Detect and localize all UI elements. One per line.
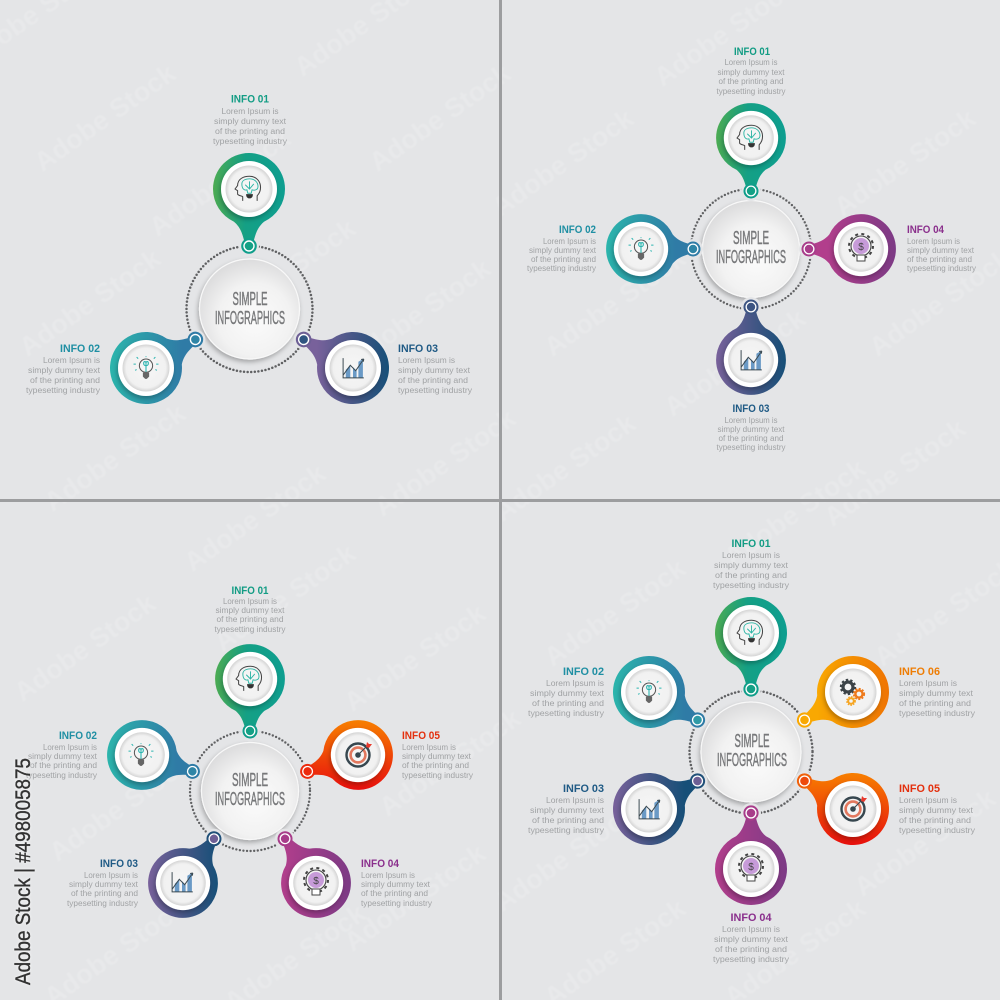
text: info 03: Lorem Ipsum is bbox=[84, 870, 138, 880]
node: info 03 bbox=[134, 811, 248, 932]
text: info 04 bbox=[713, 912, 790, 964]
center circle: INFOGRAPHICS bbox=[717, 750, 787, 770]
text: info 01: typesetting industry bbox=[214, 624, 286, 634]
node: info 03 bbox=[600, 745, 724, 858]
text: info 04 bbox=[361, 858, 433, 908]
text: info 03: INFO 03 bbox=[398, 343, 438, 355]
center circle: SIMPLE bbox=[232, 289, 268, 309]
node: info 04: $ bbox=[748, 862, 754, 873]
center circle: SIMPLE bbox=[734, 731, 770, 751]
text: info 06: INFO 06 bbox=[899, 666, 940, 678]
watermark pattern: Adobe Stock bbox=[849, 782, 1000, 902]
text: info 04: of the printing and bbox=[715, 944, 787, 954]
watermark pattern: Adobe Stock bbox=[364, 57, 517, 177]
node: info 01 bbox=[213, 153, 285, 256]
text: info 01: INFO 01 bbox=[231, 94, 269, 106]
text: info 01: INFO 01 bbox=[734, 46, 770, 58]
text: info 04: simply dummy text bbox=[714, 934, 789, 944]
dotted ring bbox=[186, 246, 312, 372]
node: info 05 bbox=[287, 711, 402, 808]
text: info 05: typesetting industry bbox=[899, 825, 976, 835]
node: info 04: $ bbox=[313, 876, 319, 887]
text: info 03: simply dummy text bbox=[530, 805, 605, 815]
text: info 02: typesetting industry bbox=[528, 708, 605, 718]
text: info 04 bbox=[907, 224, 977, 273]
text: info 04: typesetting industry bbox=[907, 263, 977, 273]
text: info 05: of the printing and bbox=[899, 815, 971, 825]
text: info 01: simply dummy text bbox=[714, 560, 789, 570]
center circle: INFOGRAPHICS bbox=[716, 247, 786, 267]
text: info 04: simply dummy text bbox=[361, 879, 431, 889]
text: info 02: simply dummy text bbox=[529, 245, 597, 255]
node: info 04 bbox=[715, 803, 787, 905]
watermark pattern: Adobe Stock bbox=[144, 122, 297, 242]
panel: four-item diagram bbox=[527, 46, 977, 452]
text: info 02: of the printing and bbox=[531, 254, 596, 264]
text: info 05 bbox=[402, 730, 474, 780]
text: info 03: of the printing and bbox=[532, 815, 604, 825]
text: info 03 bbox=[528, 783, 605, 835]
center circle: SIMPLE bbox=[232, 770, 268, 790]
watermark pattern: Adobe Stock bbox=[179, 457, 332, 577]
text: info 02: simply dummy text bbox=[28, 751, 98, 761]
text: info 05: Lorem Ipsum is bbox=[899, 795, 957, 805]
node: info 04 bbox=[251, 811, 365, 932]
text: info 01: simply dummy text bbox=[718, 67, 785, 77]
text: info 03: typesetting industry bbox=[398, 385, 473, 395]
watermark pattern: Adobe Stock bbox=[339, 837, 492, 957]
watermark pattern: Adobe Stock bbox=[209, 537, 362, 657]
node: info 06 bbox=[778, 643, 902, 756]
text: info 05: simply dummy text bbox=[402, 751, 472, 761]
text: info 05: of the printing and bbox=[402, 760, 469, 770]
text: info 01: of the printing and bbox=[718, 76, 784, 86]
text: info 04: INFO 04 bbox=[907, 224, 945, 236]
node: info 04: $ bbox=[858, 242, 864, 253]
center circle bbox=[202, 742, 298, 840]
text: info 05 bbox=[899, 783, 976, 835]
text: info 02 bbox=[527, 224, 597, 273]
text: info 05: INFO 05 bbox=[402, 730, 440, 742]
text: info 04: INFO 04 bbox=[361, 858, 400, 870]
watermark pattern: Adobe Stock bbox=[14, 242, 167, 362]
text: info 06: simply dummy text bbox=[899, 688, 974, 698]
watermark pattern: Adobe Stock bbox=[29, 57, 182, 177]
text: info 01 bbox=[213, 94, 288, 146]
text: info 03: Lorem Ipsum is bbox=[546, 795, 604, 805]
text: info 03: simply dummy text bbox=[718, 424, 785, 434]
text: info 01: INFO 01 bbox=[732, 538, 770, 550]
watermark pattern: Adobe Stock bbox=[369, 402, 522, 522]
text: info 04: Lorem Ipsum is bbox=[722, 924, 780, 934]
node: info 02 bbox=[606, 214, 703, 284]
text: info 01: Lorem Ipsum is bbox=[223, 596, 277, 606]
node: info 02 bbox=[98, 711, 213, 808]
text: info 03: typesetting industry bbox=[67, 898, 139, 908]
watermark pattern: Adobe Stock bbox=[719, 452, 872, 572]
text: info 03 bbox=[67, 858, 139, 908]
text: info 06: typesetting industry bbox=[899, 708, 976, 718]
center circle: INFOGRAPHICS bbox=[215, 789, 285, 809]
text: info 03: of the printing and bbox=[398, 375, 468, 385]
text: info 03 bbox=[716, 403, 786, 452]
node: info 01 bbox=[716, 103, 786, 201]
watermark pattern: Adobe Stock bbox=[489, 407, 642, 527]
text: info 02: typesetting industry bbox=[527, 263, 597, 273]
text: info 03: of the printing and bbox=[718, 433, 784, 443]
text: info 02: typesetting industry bbox=[26, 385, 101, 395]
text: info 01: typesetting industry bbox=[713, 580, 790, 590]
text: info 04: of the printing and bbox=[361, 888, 428, 898]
node: info 04 bbox=[799, 214, 896, 284]
center circle: SIMPLE bbox=[733, 228, 769, 248]
text: info 02 bbox=[528, 666, 605, 718]
text: info 02 bbox=[26, 343, 101, 395]
text: info 02: Lorem Ipsum is bbox=[43, 355, 100, 365]
text: info 02: Lorem Ipsum is bbox=[43, 742, 97, 752]
stock image id label: Adobe Stock | #498005875 bbox=[12, 758, 35, 985]
text: info 05: Lorem Ipsum is bbox=[402, 742, 456, 752]
node: info 01 bbox=[715, 597, 787, 699]
text: info 02: Lorem Ipsum is bbox=[546, 678, 604, 688]
center circle bbox=[702, 200, 800, 298]
text: info 05: INFO 05 bbox=[899, 783, 940, 795]
text: info 04: INFO 04 bbox=[730, 912, 772, 924]
text: info 03: INFO 03 bbox=[563, 783, 604, 795]
text: info 04: typesetting industry bbox=[713, 954, 790, 964]
dotted ring bbox=[690, 690, 812, 814]
text: info 05: typesetting industry bbox=[402, 770, 474, 780]
text: info 02: typesetting industry bbox=[26, 770, 98, 780]
node: info 01 bbox=[215, 644, 285, 741]
text: info 04: Lorem Ipsum is bbox=[361, 870, 415, 880]
node: info 03 bbox=[277, 303, 402, 417]
watermark pattern: Adobe Stock bbox=[209, 212, 362, 332]
watermark pattern: Adobe Stock bbox=[539, 242, 692, 362]
node: info 02 bbox=[97, 303, 222, 417]
watermark pattern: Adobe Stock bbox=[44, 747, 197, 867]
watermark pattern: Adobe Stock bbox=[374, 702, 527, 822]
text: info 06: of the printing and bbox=[899, 698, 971, 708]
text: info 01: typesetting industry bbox=[716, 86, 786, 96]
dotted ring bbox=[190, 731, 310, 851]
text: info 06: Lorem Ipsum is bbox=[899, 678, 957, 688]
text: info 01: of the printing and bbox=[715, 570, 787, 580]
text: info 04: simply dummy text bbox=[907, 245, 975, 255]
text: info 03: Lorem Ipsum is bbox=[724, 415, 778, 425]
text: info 03: typesetting industry bbox=[528, 825, 605, 835]
text: info 02: INFO 02 bbox=[60, 343, 100, 355]
text: info 02 bbox=[26, 730, 98, 780]
watermark pattern: Adobe Stock bbox=[9, 587, 162, 707]
text: info 04: Lorem Ipsum is bbox=[907, 236, 960, 246]
text: info 04: of the printing and bbox=[907, 254, 972, 264]
text: info 02: simply dummy text bbox=[28, 365, 101, 375]
text: info 04: typesetting industry bbox=[361, 898, 433, 908]
text: info 03: INFO 03 bbox=[732, 403, 770, 415]
watermark pattern: Adobe Stock bbox=[487, 102, 640, 222]
text: info 01: Lorem Ipsum is bbox=[724, 57, 778, 67]
panel: three-item diagram bbox=[26, 94, 473, 417]
text: info 03: of the printing and bbox=[71, 888, 138, 898]
watermark pattern: Adobe Stock bbox=[659, 302, 812, 422]
text: info 02: of the printing and bbox=[30, 375, 100, 385]
text: info 05: simply dummy text bbox=[899, 805, 974, 815]
watermark pattern: Adobe Stock bbox=[539, 552, 692, 672]
panel: five-item diagram bbox=[26, 585, 474, 932]
center circle bbox=[200, 259, 300, 359]
text: info 01 bbox=[214, 585, 286, 634]
text: info 01 bbox=[716, 46, 786, 96]
text: info 02: of the printing and bbox=[30, 760, 97, 770]
panel: six-item diagram bbox=[528, 538, 976, 964]
text: info 02: INFO 02 bbox=[563, 666, 604, 678]
watermark pattern: Adobe Stock bbox=[819, 412, 972, 532]
dotted ring bbox=[691, 189, 811, 309]
text: info 01: INFO 01 bbox=[232, 585, 268, 597]
text: info 03: typesetting industry bbox=[716, 442, 786, 452]
text: info 02: INFO 02 bbox=[59, 730, 97, 742]
text: info 01: simply dummy text bbox=[214, 116, 287, 126]
watermark pattern: Adobe Stock bbox=[489, 797, 642, 917]
node: info 05 bbox=[778, 745, 902, 858]
text: info 03 bbox=[398, 343, 473, 395]
text: info 01: Lorem Ipsum is bbox=[222, 106, 278, 116]
text: info 01: simply dummy text bbox=[216, 605, 285, 615]
text: info 01: typesetting industry bbox=[213, 136, 288, 146]
watermark pattern: Adobe Stock bbox=[344, 252, 497, 372]
center circle: INFOGRAPHICS bbox=[215, 308, 285, 328]
node: info 02 bbox=[600, 643, 724, 756]
text: info 02: simply dummy text bbox=[530, 688, 605, 698]
node: info 03 bbox=[716, 297, 786, 395]
watermark pattern: Adobe Stock bbox=[39, 397, 192, 517]
text: info 03: simply dummy text bbox=[398, 365, 471, 375]
text: info 02: of the printing and bbox=[532, 698, 604, 708]
text: info 01: of the printing and bbox=[215, 126, 285, 136]
text: info 03: Lorem Ipsum is bbox=[398, 355, 455, 365]
watermark pattern: Adobe Stock bbox=[829, 102, 982, 222]
text: info 02: Lorem Ipsum is bbox=[543, 236, 596, 246]
text: info 01: Lorem Ipsum is bbox=[722, 550, 780, 560]
center circle bbox=[701, 702, 801, 802]
text: info 03: simply dummy text bbox=[69, 879, 139, 889]
text: info 02: INFO 02 bbox=[559, 224, 596, 236]
text: info 01 bbox=[713, 538, 790, 590]
text: info 03: INFO 03 bbox=[100, 858, 138, 870]
watermark pattern: Adobe Stock bbox=[339, 597, 492, 717]
text: info 01: of the printing and bbox=[216, 614, 284, 624]
text: info 06 bbox=[899, 666, 976, 718]
